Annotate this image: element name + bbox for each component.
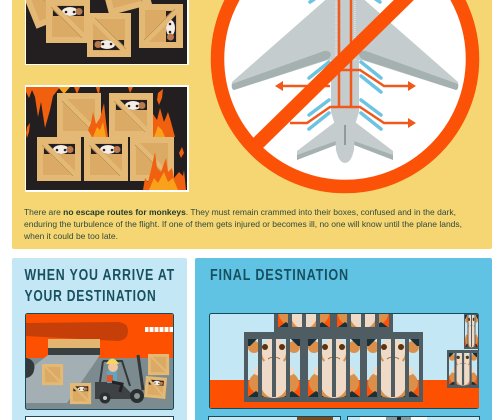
prohibition ring and slash (218, 0, 472, 186)
forklift driver (95, 355, 144, 404)
next illustration frame (26, 416, 174, 420)
next illustration frames (208, 416, 480, 420)
illustration: forklift unloading crates (26, 314, 174, 410)
illustration: caged monkeys (209, 313, 479, 409)
text: no escape routes description (23, 207, 462, 241)
illustration: stacked crates in the dark (20, 0, 189, 65)
heading: when you arrive: WHEN YOU ARRIVE AT (24, 267, 175, 284)
icon: prohibited aeroplane (218, 0, 472, 186)
text: no escape routes description: There are no escape routes for monkeys. They must remain crammed into their boxes, confused and in the dark, (24, 207, 456, 217)
text: no escape routes description: when it could be too late. (23, 231, 118, 241)
panel: final destination (195, 258, 492, 420)
text: no escape routes description: enduring the turbulence of the flight. If one of them gets injured or becomes ill, no one will know until the plane lands, (24, 219, 462, 229)
panel: when you arrive at your destination: YOUR DESTINATION (24, 288, 156, 305)
aeroplane (232, 0, 458, 163)
panel: when you arrive at your destination (12, 258, 187, 420)
illustration: crates on fire (25, 85, 189, 192)
heading: final destination: FINAL DESTINATION (210, 267, 349, 284)
panel: no escape routes (12, 0, 492, 249)
